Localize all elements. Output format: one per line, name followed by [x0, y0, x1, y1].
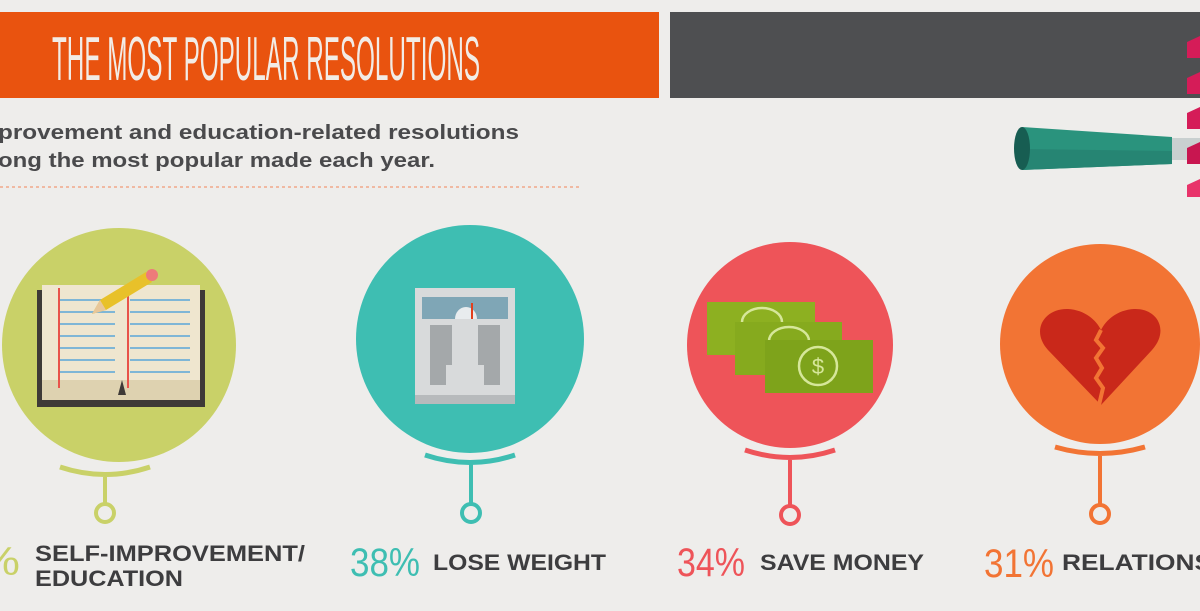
- icon: money: [707, 302, 873, 393]
- icon: scale: [415, 288, 515, 404]
- icon: pencil: [92, 269, 158, 314]
- item: save money: [687, 242, 893, 524]
- item: relationships: [1000, 244, 1200, 523]
- label: relationships: 31%: [984, 542, 1054, 586]
- icon: broken heart: [1040, 309, 1160, 405]
- label: relationships: RELATIONS: [1062, 550, 1200, 575]
- dark banner: [670, 12, 1200, 98]
- intro text: ong the most popular made each year.: [0, 150, 435, 172]
- label: self-improvement: [0, 540, 305, 591]
- item: lose weight: [356, 225, 584, 522]
- label: self-improvement: SELF-IMPROVEMENT/: [35, 541, 305, 566]
- label: save money: 34%: [677, 541, 745, 585]
- label: save money: [677, 541, 924, 585]
- intro text: provement and education-related resolutions: [0, 122, 519, 144]
- label: save money: SAVE MONEY: [760, 550, 924, 575]
- icon: book: [37, 269, 205, 407]
- item: self-improvement: [2, 228, 236, 522]
- icon: party horn: [1014, 36, 1200, 197]
- label: lose weight: LOSE WEIGHT: [433, 550, 607, 575]
- label: lose weight: 38%: [350, 541, 420, 585]
- label: lose weight: [350, 541, 607, 585]
- label: relationships: [984, 542, 1200, 586]
- title banner: THE MOST POPULAR RESOLUTIONS: [52, 25, 480, 94]
- label: self-improvement: EDUCATION: [35, 566, 183, 591]
- title banner: [0, 12, 659, 98]
- intro text: [0, 122, 519, 172]
- icon: money: $: [812, 354, 824, 379]
